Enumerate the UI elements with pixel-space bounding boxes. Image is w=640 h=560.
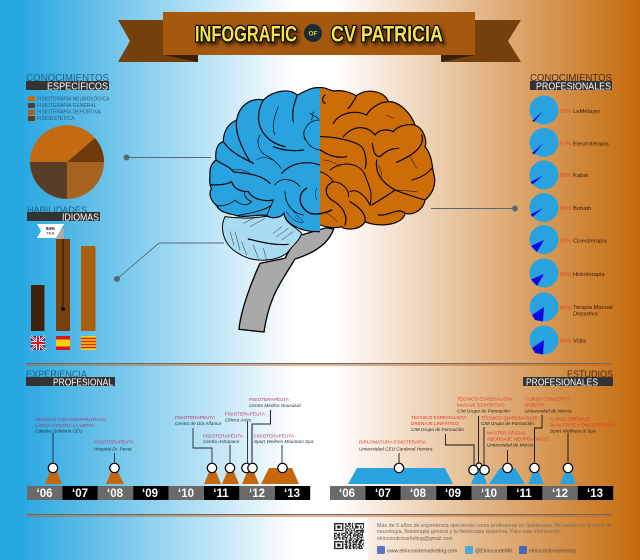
job: sport wellness: FISIOTERAPÉUTA	[254, 432, 295, 438]
study: diplomatura: Universidad CEU Cardenal Herrera	[359, 446, 433, 452]
footer	[321, 518, 612, 560]
bio text: Más de 5 años de experiencia ejerciendo como profesional en fisioterapia. Mi pasión es la rama de	[377, 523, 612, 529]
year axis: ‘12	[552, 488, 568, 500]
gauge: cinesiterapia	[530, 225, 608, 254]
heading: conocimientos profesionales: PROFESIONALES	[536, 82, 611, 92]
study: bobath: CURSO CONCEPTO	[525, 396, 570, 402]
title text	[195, 22, 443, 46]
gauge: terapia manual deportiva: 86%	[560, 306, 571, 312]
heading: estudios profesionales: ESTUDIOS	[567, 368, 613, 380]
job: clinica artes	[225, 410, 266, 422]
cerebellum	[223, 213, 302, 260]
study: kinesiotape: Sport Wellness & Spa	[550, 428, 596, 434]
study: bobath: BOBATH	[525, 402, 544, 408]
link: web: www.elrincondemarketing.com	[387, 548, 457, 554]
heading: conocimientos profesionales: CONOCIMIENTOS	[530, 72, 612, 84]
heading: conocimientos especificos: ESPECÍFICOS	[47, 80, 108, 92]
job: centro medico: FISIOTERAPÉUTA	[249, 396, 290, 402]
job: sport wellness: Sport Wellnes Mountain Spa	[254, 439, 314, 444]
job: astrapace: Centro Astrapace	[203, 439, 240, 444]
study: drenaje linfatico: TÉCNICO ESPECIALISTA	[411, 414, 467, 420]
job: centro de dia: FISIOTERAPÉUTA	[175, 414, 216, 420]
flag: spain	[56, 336, 70, 350]
study: master: MÁSTER OFICIAL	[487, 430, 526, 436]
flag: uk	[31, 336, 45, 350]
heading: estudios profesionales: PROFESIONALES	[526, 378, 598, 388]
job: medidas fisioterapeuticas: LUCHA CONTRA LA LEPRA	[35, 423, 96, 428]
right hemisphere orange	[320, 88, 435, 232]
study: quiromasaje: CIM Grupo de Formación	[481, 421, 534, 426]
gauge: vojta	[530, 326, 587, 354]
bio text: elrincondemarketing@gmail.com	[377, 536, 453, 542]
legend	[28, 96, 110, 122]
section divider: footer	[26, 514, 612, 516]
job: astrapace: FISIOTERAPÉUTA	[203, 432, 244, 438]
gauge: terapia manual deportiva	[530, 292, 613, 322]
job: sport wellness	[254, 432, 314, 444]
gauge: lemetayer	[530, 96, 600, 124]
year axis	[330, 486, 613, 500]
study: drenaje linfatico	[411, 414, 467, 432]
legend: FISIOTERAPIA DEPORTIVA	[37, 110, 102, 116]
year axis: ‘07	[72, 488, 88, 500]
gauge: terapia manual deportiva: Deportiva	[573, 312, 599, 318]
legend: FISIOTERAPIA GENERAL	[37, 103, 97, 109]
study: master: Universidad de Murcia	[487, 442, 534, 448]
banner folds	[163, 55, 475, 62]
gauge: vojta: 86%	[560, 338, 571, 344]
year axis: ‘08	[107, 488, 124, 500]
year axis: ‘13	[284, 488, 300, 500]
link: facebook	[519, 546, 576, 554]
job: centro medico: Centro Médico Nousalud	[249, 403, 301, 408]
heading: habilidades idiomas: IDIOMAS	[62, 212, 99, 224]
left hemisphere blue	[210, 88, 320, 232]
bar: espanol	[56, 239, 70, 331]
year axis: ‘06	[36, 488, 52, 500]
gauge: bobath: 95%	[560, 206, 571, 212]
banner left tail	[118, 20, 198, 62]
value needle	[61, 237, 65, 311]
connector: idiomas to brain	[114, 243, 224, 282]
gauge: lemetayer: 97%	[560, 109, 571, 115]
connector lines	[399, 415, 568, 465]
year axis: ‘12	[249, 488, 265, 500]
study: masaje deportivo: TÉCNICO ESPECIALISTA	[457, 396, 513, 402]
heading: experiencia profesional: EXPERIENCIA	[26, 368, 87, 380]
legend: FISIOESTÉTICA	[37, 115, 75, 122]
qr code	[321, 518, 368, 560]
heading: habilidades idiomas	[27, 205, 100, 224]
panel: habilidades idiomas	[27, 205, 100, 350]
gauge: electroterapia: Electroterapia	[573, 142, 610, 148]
study: bobath	[525, 396, 572, 414]
gauge: cinesiterapia: 90%	[560, 238, 571, 244]
job: centro medico	[249, 396, 301, 408]
gauge: electroterapia	[530, 128, 610, 157]
job: centro de dia: Centro de Día Alfamur	[175, 421, 222, 426]
connector: brain to conocimientos profesionales	[431, 206, 518, 211]
connector lines	[53, 410, 282, 463]
flag: catalonia	[81, 336, 96, 350]
study: master	[487, 430, 549, 448]
year axis: ‘08	[410, 488, 427, 500]
bio text	[377, 523, 612, 542]
job: hospital: FISIOTERAPÉUTA	[94, 438, 135, 444]
gauge: kabat: Kabat	[573, 173, 589, 179]
heading: conocimientos especificos	[26, 72, 109, 92]
study: kinesiotape: CURSO DRENAJE,	[550, 416, 591, 422]
heading: conocimientos especificos: CONOCIMIENTOS	[26, 72, 109, 84]
period mounds	[45, 468, 299, 484]
job: clinica artes: Clínica Artes	[225, 418, 252, 422]
study: kinesiotape	[550, 416, 616, 434]
panel: conocimientos especificos	[26, 72, 110, 199]
banner right tail	[441, 20, 521, 62]
gauge: vojta: Vojta	[573, 338, 587, 344]
brain stem	[239, 228, 334, 332]
year axis: ‘06	[339, 488, 355, 500]
value ribbon	[37, 224, 64, 239]
job: centro de dia	[175, 414, 222, 426]
heading: experiencia profesional	[26, 368, 115, 388]
panel: conocimientos profesionales	[530, 72, 613, 354]
gauge: kabat	[530, 160, 589, 190]
study: drenaje linfatico: CIM Grupo de Formación	[411, 427, 464, 432]
markers	[48, 463, 287, 473]
bio text: neurología, fisioterapia general y la fisioterapia deportiva. Para más información:	[377, 529, 562, 535]
heading: experiencia profesional: PROFESIONAL	[53, 378, 113, 388]
gauge: kabat: 95%	[560, 173, 571, 179]
link: twitter	[465, 546, 513, 554]
panel: experiencia profesional	[26, 368, 314, 500]
year axis	[27, 486, 310, 500]
gauge: hidroterapia	[530, 258, 605, 288]
of badge: OF	[308, 30, 318, 38]
gauge: lemetayer: LeMétayer	[573, 109, 600, 115]
markers	[394, 463, 573, 475]
gauge: electroterapia: 97%	[560, 142, 571, 148]
study: masaje deportivo	[457, 396, 513, 414]
heading: estudios profesionales	[523, 368, 613, 388]
year axis: ‘09	[142, 488, 158, 500]
banner main band	[163, 12, 475, 55]
title text: CV PATRICIA	[331, 22, 443, 46]
illustration: brain	[210, 88, 435, 332]
gauge: bobath	[530, 193, 591, 222]
pie chart	[30, 125, 104, 199]
study: diplomatura	[359, 440, 433, 452]
job: astrapace	[203, 432, 244, 444]
legend: FISIOTERAPIA NEUROLÓGICA	[37, 96, 110, 102]
bar: ingles	[31, 285, 44, 331]
study: masaje deportivo: CIM Grupo de Formación	[457, 408, 510, 414]
bar: catalan	[81, 246, 96, 331]
job: medidas fisioterapeuticas	[35, 416, 106, 434]
study: quiromasaje	[481, 414, 538, 426]
gauge: cinesiterapia: Cinesiterapia	[573, 238, 608, 244]
connector: pie to brain	[124, 155, 211, 160]
study: drenaje linfatico: DRENAJE LINFÁTICO	[411, 420, 459, 426]
year axis: ‘11	[516, 488, 532, 500]
year axis: ‘09	[445, 488, 461, 500]
link: web	[377, 546, 457, 554]
gauge: bobath: Bobath	[573, 206, 591, 212]
year axis: ‘10	[481, 488, 497, 500]
brain folds blue	[210, 95, 332, 222]
study: kinesiotape: BKINATAPE Y ONCOTERAPIA	[550, 422, 616, 428]
gauge: hidroterapia: 90%	[560, 272, 571, 278]
gauge: hidroterapia: Hidroterapia	[573, 272, 605, 278]
of badge	[304, 24, 322, 42]
heading: conocimientos profesionales	[530, 72, 612, 92]
year axis: ‘10	[178, 488, 194, 500]
study: masaje deportivo: MASAJE DEPORTIVO	[457, 402, 505, 408]
job: clinica artes: FISIOTERAPÉUTA	[225, 410, 266, 416]
job: hospital	[94, 438, 135, 452]
title banner	[118, 12, 521, 62]
job: hospital: Hospital Dr. Peset	[94, 446, 132, 452]
year axis: ‘13	[587, 488, 603, 500]
brain folds orange	[320, 95, 432, 225]
study: quiromasaje: TÉCNICO QUIROMASAJE	[481, 414, 538, 420]
year axis: ‘07	[375, 488, 391, 500]
period mounds	[348, 468, 576, 484]
job: medidas fisioterapeuticas: Cátedra Solidaria CEU	[35, 428, 83, 434]
link: facebook: elrincondemarketing	[529, 548, 576, 554]
year axis: ‘11	[213, 488, 229, 500]
study: master: ABORDAJE NEUROLÓGICO	[487, 436, 549, 442]
title text: INFOGRAFIC	[195, 22, 297, 46]
gauge: terapia manual deportiva: Terapia Manual	[573, 305, 613, 311]
section divider: timelines	[26, 364, 612, 365]
heading: habilidades idiomas: HABILIDADES	[27, 205, 87, 216]
link: twitter: @ElrincondeMK	[475, 548, 513, 554]
value ribbon: 54%	[46, 226, 55, 231]
job: medidas fisioterapeuticas: MEDIDAS FISIOTERAPÉUTICAS	[35, 416, 106, 422]
brain outline	[210, 88, 435, 232]
value ribbon: TEA	[47, 230, 55, 236]
study: diplomatura: DIPLOMATURA FISIOTERAPIA	[359, 440, 427, 444]
panel: estudios profesionales	[330, 368, 616, 500]
study: bobath: Universidad de Murcia	[525, 408, 572, 414]
